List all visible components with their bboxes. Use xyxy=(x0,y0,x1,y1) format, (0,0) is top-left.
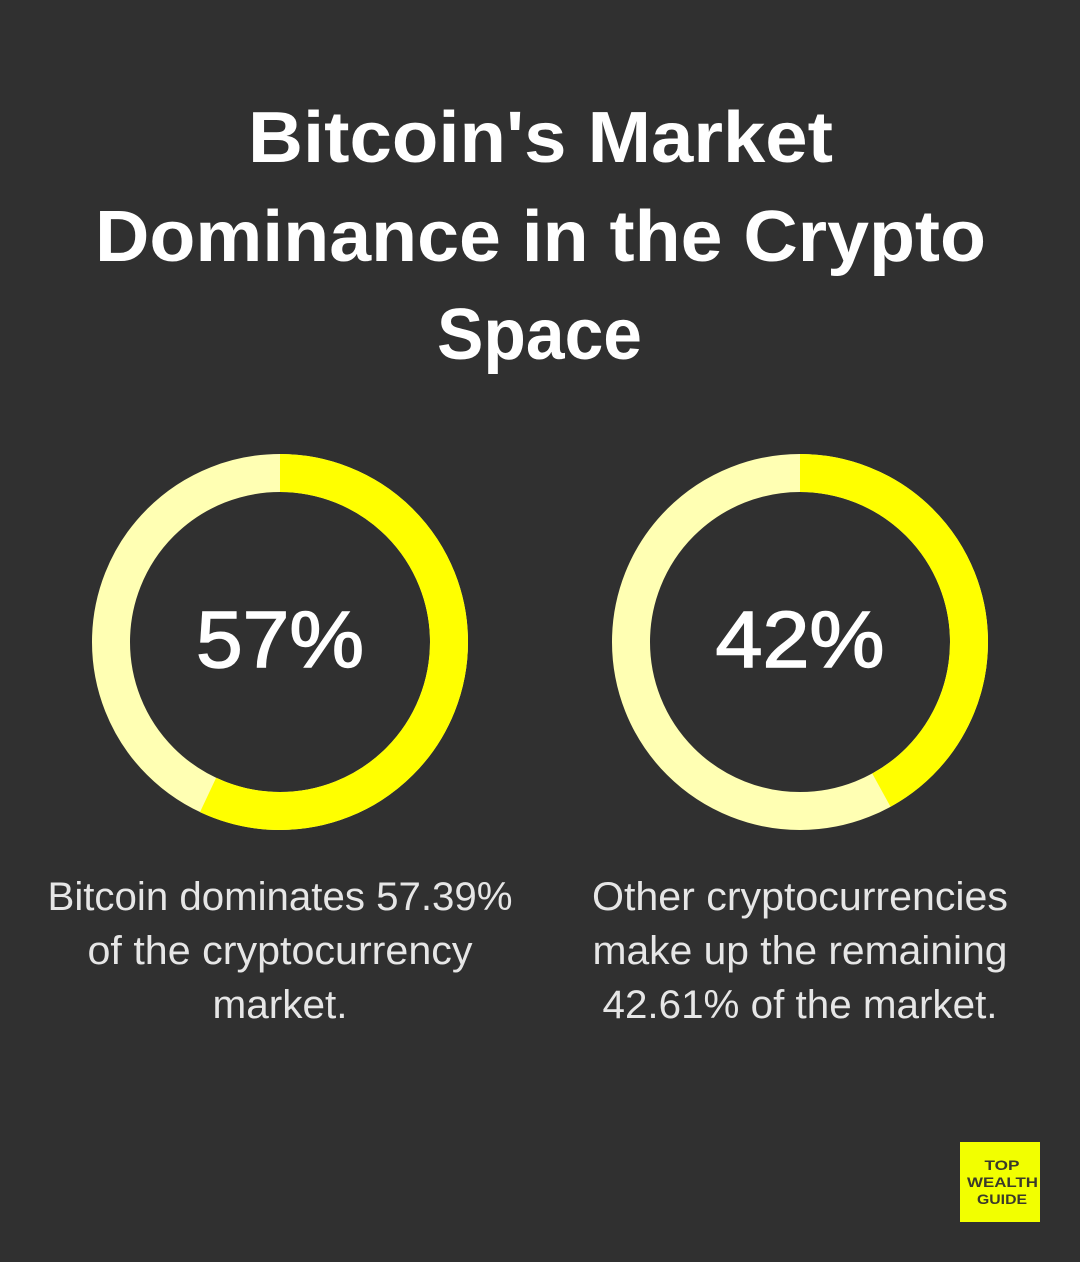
logo: Top Wealth Guide: GUIDE xyxy=(977,1191,1027,1207)
title: Bitcoin's Market xyxy=(248,98,833,178)
description: other cryptocurrencies: 42.61% of the market. xyxy=(602,983,998,1027)
panel: Bitcoin share xyxy=(48,473,512,1027)
logo: Top Wealth Guide: TOP xyxy=(984,1157,1020,1173)
description: other cryptocurrencies xyxy=(592,875,1008,1027)
description: Bitcoin: Bitcoin dominates 57.39% xyxy=(48,875,512,919)
value: 57%: 57% xyxy=(196,595,364,684)
donut chart: 42% xyxy=(631,473,969,811)
description: other cryptocurrencies: Other cryptocurrencies xyxy=(592,875,1008,919)
description: Bitcoin: market. xyxy=(212,983,348,1027)
value: 42%: 42% xyxy=(716,595,884,684)
title: Space xyxy=(437,295,642,375)
title xyxy=(95,98,986,375)
donut chart: 57% xyxy=(111,473,449,811)
logo: Top Wealth Guide: WEALTH xyxy=(967,1174,1038,1190)
description: other cryptocurrencies: make up the remaining xyxy=(592,929,1008,973)
panel: other cryptocurrencies share xyxy=(592,473,1008,1027)
description: Bitcoin xyxy=(48,875,512,1027)
description: Bitcoin: of the cryptocurrency xyxy=(88,929,472,973)
logo: Top Wealth Guide xyxy=(960,1142,1040,1222)
title: Dominance in the Crypto xyxy=(95,197,986,277)
